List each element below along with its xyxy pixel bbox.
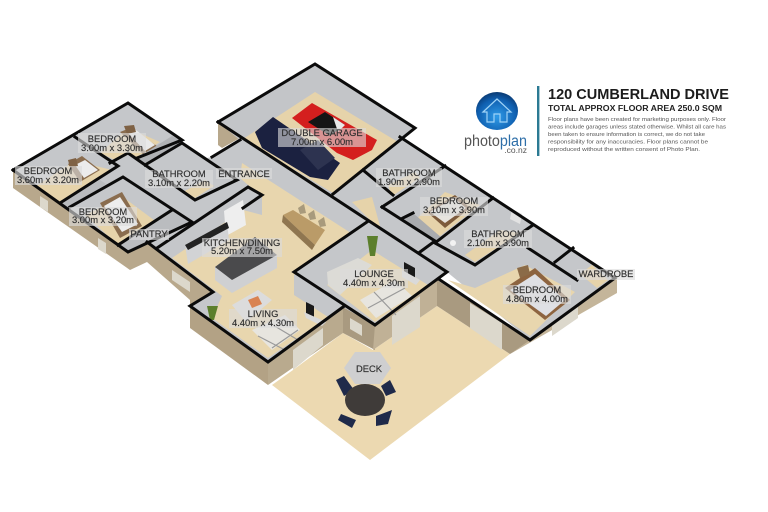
room: bedroom north-east [403, 192, 480, 242]
label: bedroom 4.80 x 4.00: 4.80m x 4.00m [506, 293, 568, 304]
label: bedroom 3.60 x 3.20: 3.60m x 3.20m [17, 174, 79, 185]
label: deck: DECK [356, 363, 383, 374]
floor plan drawing [13, 64, 617, 460]
title block [548, 87, 729, 153]
label: bathroom 2.10 x 3.90: BATHROOM [471, 228, 525, 239]
exterior doors and windows [40, 196, 578, 370]
icon: living sofa [232, 290, 272, 322]
label: bedroom 3.10 x 3.90 [420, 195, 488, 216]
label: lounge: 4.40m x 4.30m [343, 277, 405, 288]
icon: lounge television [402, 262, 420, 285]
room: hall east [352, 197, 381, 230]
label: kitchen/dining: 5.20m x 7.50m [211, 245, 273, 256]
label: kitchen/dining: KITCHEN/DINING [204, 237, 280, 248]
label: living: 4.40m x 4.30m [232, 317, 294, 328]
label: kitchen/dining [202, 237, 282, 257]
label: living [229, 308, 297, 328]
title: 120 CUMBERLAND DRIVE [548, 87, 729, 103]
logo wordmark: photoplan [464, 133, 527, 150]
label: deck [344, 352, 391, 384]
icon: lounge rug [360, 280, 412, 318]
icon: dining table [282, 204, 326, 250]
label: bathroom 3.10 x 2.20: 3.10m x 2.20m [148, 177, 210, 188]
room: bedroom west [36, 156, 112, 208]
icon: kitchen island [215, 237, 277, 293]
icon: living rug [252, 315, 300, 350]
room labels [15, 127, 635, 384]
building footprint [13, 64, 615, 362]
icon: lounge sofa [327, 258, 372, 295]
label: bedroom 3.00 x 3.20 [69, 206, 137, 226]
label: lounge: LOUNGE [354, 268, 394, 279]
label: bedroom 3.00 x 3.20: 3.00m x 3.20m [72, 214, 134, 225]
icon: lounge plant [367, 236, 378, 256]
label: double garage: DOUBLE GARAGE [281, 127, 363, 138]
icon: blue house badge [476, 92, 518, 130]
room: bedroom south-west [85, 192, 170, 245]
label: bedroom 3.60 x 3.20: BEDROOM [24, 165, 72, 176]
subtitle: TOTAL APPROX FLOOR AREA 250.0 SQM [548, 103, 722, 113]
label: lounge [340, 268, 408, 288]
label: bedroom 4.80 x 4.00: BEDROOM [513, 284, 561, 295]
icon: plant [207, 306, 218, 320]
exterior walls [13, 123, 617, 385]
logo domain: .co.nz [504, 145, 527, 155]
deck table and chairs [336, 376, 396, 428]
icon: kitchen bench [185, 222, 229, 264]
disclaimer text [548, 117, 726, 153]
disclaimer text: responsibility for any inaccuracies. Floor plans cannot be [548, 140, 708, 146]
divider bar [537, 86, 539, 156]
room: kitchen, dining and living [172, 163, 354, 358]
label: bathroom 2.10 x 3.90 [464, 228, 532, 248]
label: bedroom 3.00 x 3.30: 3.00m x 3.30m [81, 142, 143, 153]
label: wardrobe: WARDROBE [579, 268, 633, 279]
room: bathroom east [450, 209, 522, 262]
room: pantry [118, 210, 192, 252]
room: wardrobe [580, 265, 608, 288]
icon: fridge [224, 200, 246, 236]
label: bedroom 3.00 x 3.20: BEDROOM [79, 206, 127, 217]
label: bathroom 1.90 x 2.90: 1.90m x 2.90m [378, 176, 440, 187]
label: bedroom 3.10 x 3.90: BEDROOM [430, 195, 478, 206]
room: bedroom north-west [100, 125, 160, 160]
label: double garage [278, 127, 366, 147]
label: double garage: 7.00m x 6.00m [291, 136, 353, 147]
label: bathroom 2.10 x 3.90: 2.10m x 3.90m [467, 237, 529, 248]
room: bathroom north-east [388, 172, 420, 196]
room: bedroom east [448, 265, 575, 336]
label: bathroom 3.10 x 2.20: BATHROOM [152, 168, 206, 179]
logo: photoplan [464, 92, 527, 155]
icon: living television [304, 302, 326, 326]
icon: red car [292, 103, 377, 160]
room: bathroom west [137, 136, 214, 198]
label: bedroom 3.10 x 3.90: 3.10m x 3.90m [423, 204, 485, 215]
label: bathroom 1.90 x 2.90 [376, 167, 442, 187]
disclaimer text: areas include garages unless stated otherwise. Whilst all care has [548, 124, 726, 130]
label: pantry: PANTRY [130, 228, 168, 239]
deck floor [272, 306, 510, 460]
label: bathroom 3.10 x 2.20 [145, 168, 213, 188]
label: living: LIVING [248, 308, 278, 319]
label: bedroom 4.80 x 4.00 [503, 284, 571, 304]
label: bathroom 1.90 x 2.90: BATHROOM [382, 167, 436, 178]
icon: blue car [255, 117, 340, 180]
label: bedroom 3.00 x 3.30: BEDROOM [88, 133, 136, 144]
label: bedroom 3.60 x 3.20 [15, 165, 82, 185]
label: entrance: ENTRANCE [218, 168, 270, 179]
room: lounge [294, 222, 447, 325]
label: bedroom 3.00 x 3.30 [78, 133, 146, 153]
room: double garage [218, 64, 415, 193]
disclaimer text: reproduced without the written consent of Photo Plan. [548, 147, 700, 153]
disclaimer text: been taken to ensure information is correct, we do not take [548, 132, 705, 138]
wall outlines [13, 64, 615, 362]
disclaimer text: Floor plans have been created for marketing purposes only. Floor [548, 117, 726, 123]
